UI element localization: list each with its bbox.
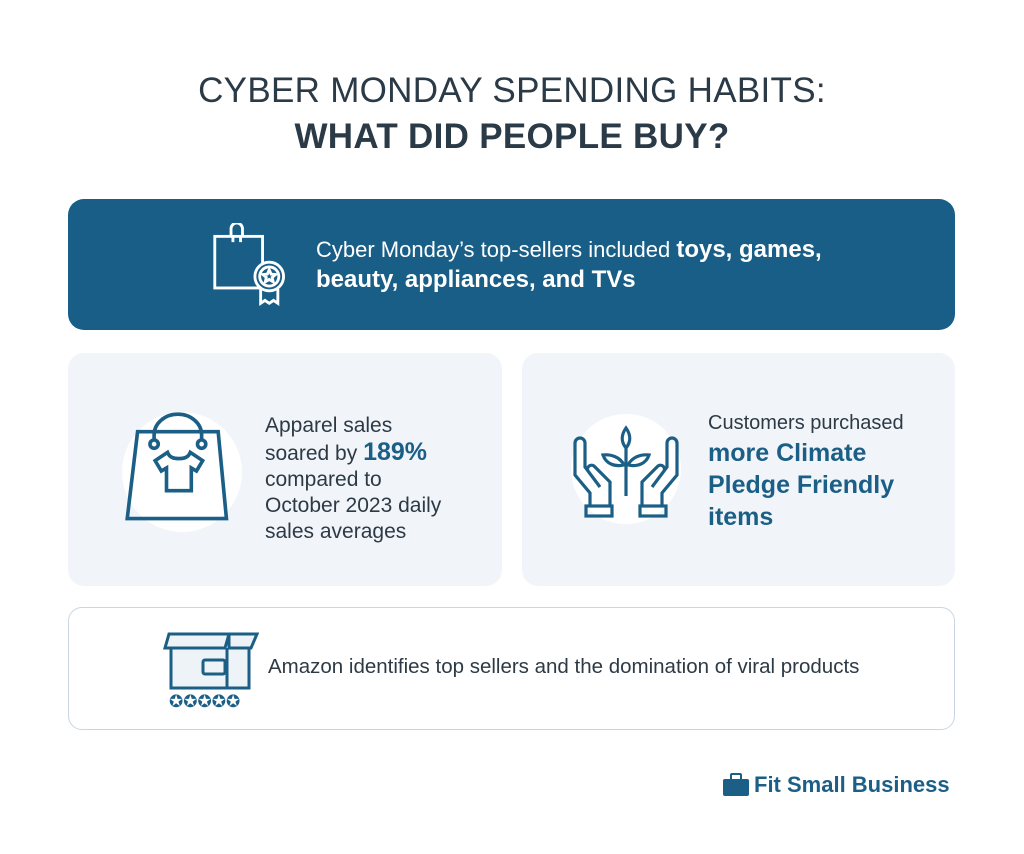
panel: top sellers banner	[68, 199, 955, 330]
text: apparel sales: Apparel sales	[265, 414, 392, 437]
icon: bag with shirt	[122, 412, 242, 532]
title: CYBER MONDAY SPENDING HABITS:	[198, 71, 826, 110]
panel: amazon viral	[68, 607, 955, 730]
text: climate pledge: Pledge Friendly	[708, 471, 894, 499]
text: apparel sales: sales averages	[265, 520, 406, 543]
text: climate pledge: Customers purchased	[708, 412, 904, 434]
logo: Fit Small Business: Fit Small Business	[754, 772, 950, 797]
text: apparel sales: compared to	[265, 468, 382, 491]
icon: briefcase	[723, 773, 749, 796]
text: top sellers	[316, 236, 822, 293]
text: climate pledge	[708, 412, 904, 531]
title: WHAT DID PEOPLE BUY?	[294, 117, 730, 156]
text: climate pledge: more Climate	[708, 439, 866, 467]
text: apparel sales	[265, 414, 442, 543]
text: apparel sales: October 2023 daily	[265, 494, 441, 517]
text: climate pledge: items	[708, 503, 773, 531]
icon: box with stars	[163, 632, 259, 710]
text: top sellers: beauty, appliances, and TVs	[316, 266, 636, 293]
panel: apparel	[68, 353, 502, 586]
text: amazon: Amazon identifies top sellers and the domination of viral products	[268, 655, 859, 678]
text: top sellers: Cyber Monday’s top-sellers included toys, games,	[316, 236, 822, 263]
icon: shopping bag with badge	[213, 223, 285, 306]
icon: hands with plant	[571, 414, 681, 524]
title	[198, 71, 826, 156]
panel: climate pledge	[522, 353, 955, 586]
text: apparel sales: soared by 189%	[265, 438, 427, 466]
